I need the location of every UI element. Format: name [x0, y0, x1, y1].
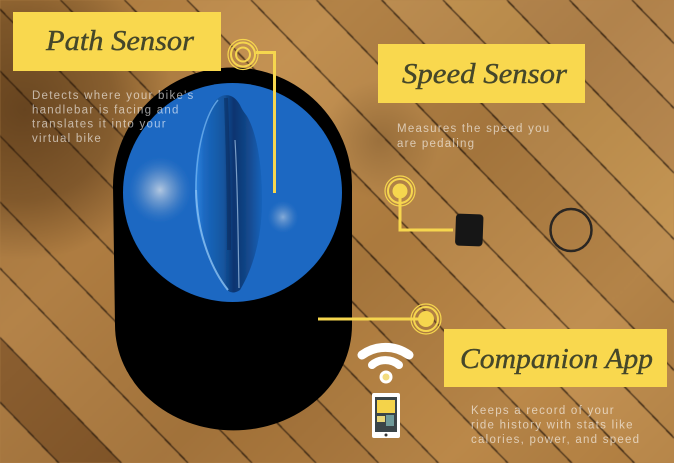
speed sensor title box — [378, 44, 585, 103]
companion app title: Companion App — [460, 344, 653, 375]
path sensor description: virtual bike — [32, 133, 102, 145]
path sensor title box — [13, 12, 221, 71]
dial highlight right — [265, 198, 301, 236]
callout: companion app label — [444, 329, 667, 387]
companion app description: calories, power, and speed — [471, 434, 640, 446]
path sensor description: translates it into your — [32, 118, 167, 130]
speed sensor title: Speed Sensor — [402, 59, 567, 90]
speed sensor marker and leader line — [385, 176, 453, 230]
rubber ring — [550, 209, 592, 251]
speed sensor description: are pedaling — [397, 138, 475, 150]
path sensor marker and leader line — [228, 40, 274, 193]
path sensor title: Path Sensor — [45, 26, 194, 57]
speed sensor device — [455, 214, 484, 246]
blue dial — [123, 83, 342, 302]
companion app description: ride history with stats like — [471, 420, 634, 432]
icon: phone with app screen — [372, 393, 400, 438]
callout: speed sensor label — [378, 44, 585, 103]
speed sensor description: Measures the speed you — [397, 123, 550, 135]
dial highlight left — [124, 152, 196, 228]
path sensor description: handlebar is facing and — [32, 104, 180, 116]
companion app description: Keeps a record of your — [471, 405, 615, 417]
icon: wifi signal — [362, 347, 409, 382]
companion app title box — [444, 329, 667, 387]
device: black base with blue dial — [113, 68, 352, 430]
path sensor description: Detects where your bike's — [32, 90, 195, 102]
callout: path sensor label — [13, 12, 221, 71]
companion app marker and leader line — [318, 304, 441, 334]
dial centre knob — [195, 95, 262, 292]
